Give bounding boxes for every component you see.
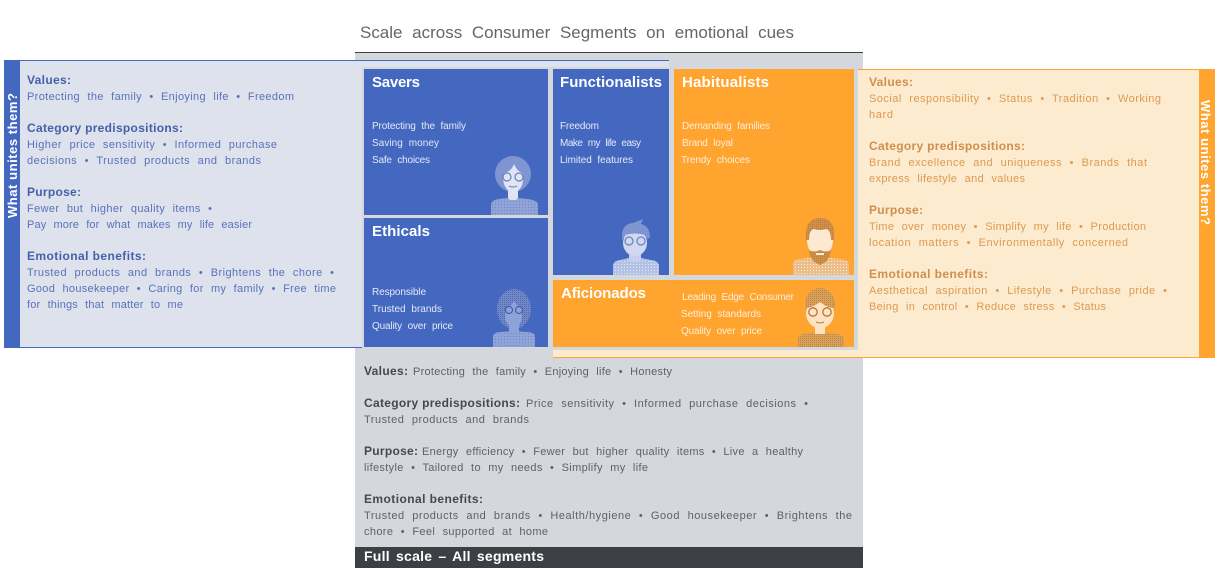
panel: blue what unites them	[4, 60, 669, 348]
values: all segments: Values:	[364, 364, 408, 378]
emotional benefits: all segments	[364, 492, 852, 538]
category predispositions: all segments: Category predispositions:	[364, 396, 520, 410]
purpose: blue	[27, 185, 252, 231]
icon: man with glasses	[613, 219, 659, 275]
header bar: what unites them left: What unites them?	[5, 93, 20, 218]
category predispositions: blue: Higher price sensitivity • Informed purchase	[27, 139, 277, 151]
values: orange	[869, 75, 1161, 121]
tile: Functionalists: Functionalists	[560, 74, 662, 91]
tile: Functionalists	[553, 69, 669, 275]
purpose: orange: Purpose:	[869, 203, 923, 217]
tile: Savers: Safe choices	[372, 155, 430, 166]
tile: Savers: Protecting the family	[372, 121, 466, 132]
values: blue: Protecting the family • Enjoying life • Freedom	[27, 91, 294, 103]
header bar: what unites them left	[4, 60, 20, 348]
tile: Habitualists: Brand loyal	[682, 138, 733, 149]
tile: Functionalists: Freedom	[560, 121, 599, 132]
tile: Ethicals: Quality over price	[372, 321, 453, 332]
tile: Savers: Saving money	[372, 138, 439, 149]
category predispositions: orange: Category predispositions:	[869, 139, 1025, 153]
tile: Ethicals: Responsible	[372, 287, 426, 298]
emotional benefits: orange	[869, 267, 1167, 313]
header bar: what unites them right	[1198, 69, 1215, 358]
tile: Aficionados: Aficionados	[561, 285, 646, 302]
emotional benefits: all segments: Emotional benefits:	[364, 492, 483, 506]
category predispositions: all segments: Trusted products and brands	[364, 414, 530, 426]
title: Scale across Consumer Segments on emotional cues	[360, 23, 794, 42]
emotional benefits: blue: for things that matter to me	[27, 299, 183, 311]
values: orange: Values:	[869, 75, 913, 89]
tile: Habitualists: Habitualists	[682, 74, 769, 91]
tile: Savers	[364, 69, 548, 215]
emotional benefits: blue: Emotional benefits:	[27, 249, 146, 263]
category predispositions: orange: express lifestyle and values	[869, 173, 1026, 185]
purpose: all segments: Energy efficiency • Fewer but higher quality items • Live a healthy	[422, 446, 804, 458]
emotional benefits: orange: Aesthetical aspiration • Lifestyle • Purchase pride •	[869, 285, 1167, 297]
emotional benefits: all segments: Trusted products and brands • Health/hygiene • Good housekeeper • Brightens the	[364, 510, 852, 522]
icon: woman with short hair	[491, 156, 538, 215]
tile: Ethicals	[364, 218, 548, 347]
tile: Functionalists: Make my life easy	[560, 138, 641, 149]
tile: Ethicals: Ethicals	[372, 223, 430, 240]
emotional benefits: blue: Good housekeeper • Caring for my family • Free time	[27, 283, 336, 295]
purpose: blue: Purpose:	[27, 185, 81, 199]
emotional benefits: orange: Being in control • Reduce stress • Status	[869, 301, 1106, 313]
purpose: all segments: Purpose:	[364, 444, 418, 458]
icon: woman with glasses and short hair	[798, 288, 844, 347]
header bar: what unites them right: What unites them?	[1198, 100, 1213, 225]
purpose: blue: Fewer but higher quality items •	[27, 203, 212, 215]
emotional benefits: orange: Emotional benefits:	[869, 267, 988, 281]
category predispositions: all segments: Price sensitivity • Informed purchase decisions •	[526, 398, 808, 410]
values: all segments: Protecting the family • Enjoying life • Honesty	[413, 366, 672, 378]
panel: orange what unites them	[553, 69, 1215, 358]
values: orange: hard	[869, 109, 893, 121]
emotional benefits: blue	[27, 249, 336, 311]
purpose: orange	[869, 203, 1146, 249]
purpose: all segments: lifestyle • Tailored to my needs • Simplify my life	[364, 462, 648, 474]
footer bar: full scale: Full scale – All segments	[364, 548, 544, 564]
tile: Habitualists	[674, 69, 854, 275]
tile: Aficionados: Setting standards	[681, 309, 761, 320]
values: orange: Social responsibility • Status • Tradition • Working	[869, 93, 1161, 105]
category predispositions: orange	[869, 139, 1147, 185]
emotional benefits: all segments: chore • Feel supported at home	[364, 526, 548, 538]
purpose: all segments	[364, 444, 804, 474]
tile: Savers: Savers	[372, 74, 420, 91]
category predispositions: blue: decisions • Trusted products and brands	[27, 155, 262, 167]
purpose: orange: location matters • Environmentally concerned	[869, 237, 1128, 249]
tile: Ethicals: Trusted brands	[372, 304, 442, 315]
purpose: orange: Time over money • Simplify my life • Production	[869, 221, 1146, 233]
panel: full scale all segments	[355, 52, 863, 568]
emotional benefits: blue: Trusted products and brands • Brightens the chore •	[27, 267, 334, 279]
tile: Functionalists: Limited features	[560, 155, 633, 166]
category predispositions: all segments	[364, 396, 808, 426]
tile: Aficionados	[553, 280, 854, 347]
footer bar: full scale	[355, 547, 863, 568]
values: blue	[27, 73, 294, 103]
tile: Habitualists: Demanding families	[682, 121, 770, 132]
category predispositions: blue	[27, 121, 277, 167]
purpose: blue: Pay more for what makes my life easier	[27, 219, 252, 231]
tile: Aficionados: Leading Edge Consumer	[682, 292, 795, 303]
category predispositions: blue: Category predispositions:	[27, 121, 183, 135]
values: blue: Values:	[27, 73, 71, 87]
icon: woman with long hair	[493, 289, 535, 347]
icon: bearded man	[793, 218, 849, 275]
tile: Habitualists: Trendy choices	[681, 155, 750, 166]
tile: Aficionados: Quality over price	[681, 326, 762, 337]
category predispositions: orange: Brand excellence and uniqueness • Brands that	[869, 157, 1147, 169]
